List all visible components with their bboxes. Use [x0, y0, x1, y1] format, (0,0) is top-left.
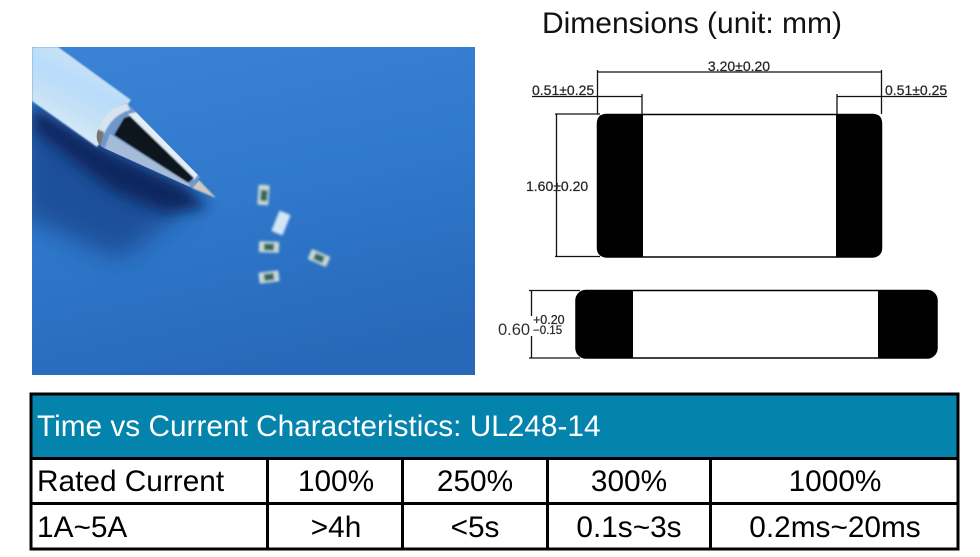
- left terminal: [576, 290, 633, 358]
- header row: Rated Current: [37, 465, 225, 498]
- icon: fuse 1: [257, 185, 270, 205]
- header row: 1000%: [789, 465, 881, 498]
- right terminal: [836, 114, 882, 257]
- dimension drawing: top view: 0.51±0.25: [532, 82, 594, 98]
- icon: fuse 5: [258, 270, 280, 284]
- fuse body top view: [598, 114, 882, 257]
- photo: pen tip beside tiny fuses on blue background: [20, 47, 475, 375]
- dimension drawing: top view: [526, 58, 947, 257]
- icon: fuse 4: [308, 249, 330, 267]
- left terminal: [597, 114, 643, 257]
- data row: <5s: [451, 511, 499, 544]
- table title: Time vs Current Characteristics: UL248-14: [37, 410, 601, 443]
- dimension drawing: side view: 0.60: [498, 321, 530, 339]
- header row: 100%: [298, 465, 374, 498]
- dimension drawing: side view: +0.20: [533, 313, 565, 327]
- fuse body side view: [576, 290, 937, 358]
- data row: >4h: [311, 511, 361, 544]
- table header band: [31, 394, 958, 458]
- dimension drawing: top view: 3.20±0.20: [708, 58, 770, 74]
- right terminal: [878, 290, 937, 358]
- icon: pen metal cone: [96, 103, 200, 188]
- header row: 300%: [591, 465, 667, 498]
- table: time vs current characteristics: [31, 394, 958, 549]
- data row: 1A~5A: [37, 511, 127, 544]
- dimension: height: [555, 114, 600, 256]
- dimension: thickness: [529, 290, 580, 358]
- data row: 0.1s~3s: [576, 511, 682, 544]
- header row: 250%: [437, 465, 513, 498]
- header row: [37, 465, 881, 498]
- icon: fuse 3: [259, 241, 279, 253]
- icon: pen barrel: [32, 47, 131, 147]
- dimension: overall length: [598, 70, 882, 114]
- dimension: right terminal width: [837, 94, 947, 114]
- icon: pen nib: [192, 180, 216, 198]
- dimension drawing: top view: 0.51±0.25: [885, 82, 947, 98]
- dimension drawing: side view: −0.15: [533, 325, 562, 337]
- data row: [37, 511, 921, 544]
- dimension drawing: top view: 1.60±0.20: [526, 178, 588, 194]
- data row: 0.2ms~20ms: [749, 511, 921, 544]
- dimension drawing: side view: [498, 290, 937, 358]
- icon: fuse 2: [271, 211, 291, 235]
- dimension: left terminal width: [532, 94, 642, 114]
- heading: dimensions: Dimensions (unit: mm): [542, 7, 842, 40]
